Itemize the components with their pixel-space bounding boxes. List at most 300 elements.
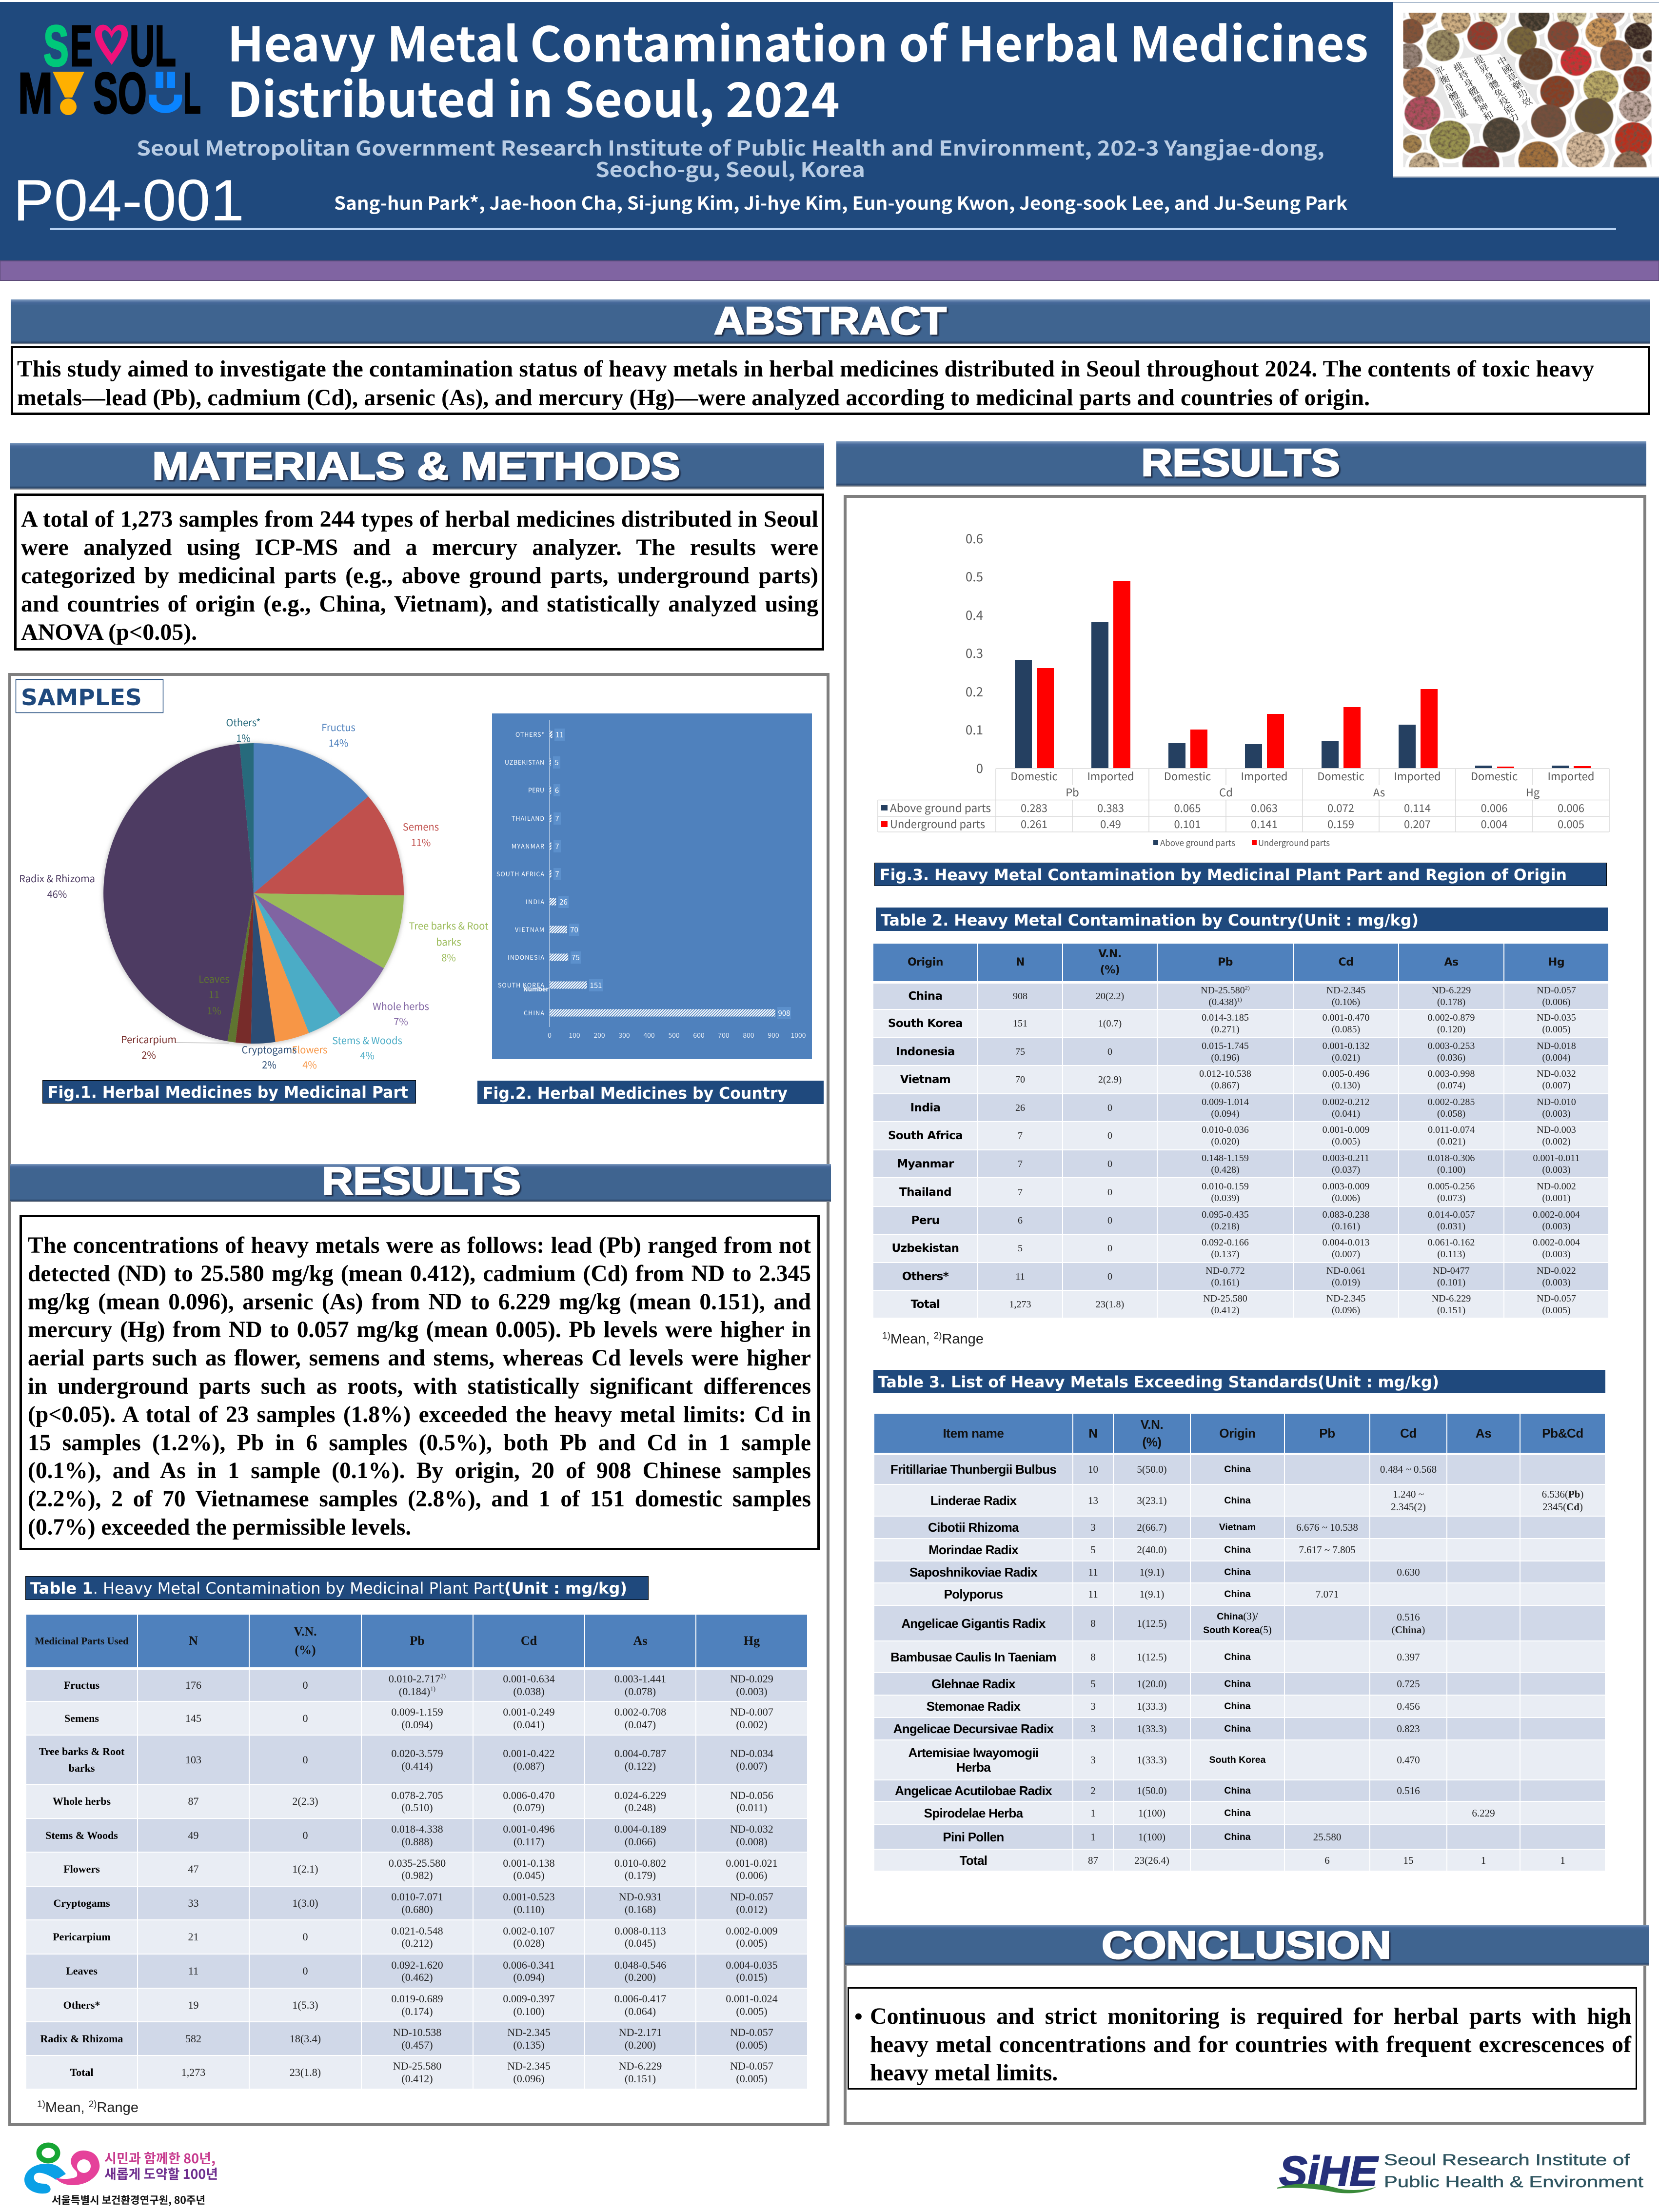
table 1: contamination by plant part: 0.004-0.787 (614, 1747, 666, 1759)
chart: metals by part and origin: 0.6 (966, 529, 983, 547)
footnote: table 2: 2) (934, 1331, 942, 1341)
chart: metals by part and origin: 0.383 (1097, 800, 1124, 815)
table 1: contamination by plant part: (0.005) (736, 2005, 768, 2017)
table 3: samples exceeding standards: Angelicae Gigantis Radix (901, 1616, 1046, 1631)
table 1: contamination by plant part: (0.002) (736, 1718, 768, 1730)
chart: metals by part and origin: Imported (1547, 768, 1595, 784)
table 2: contamination by country: 0.095-0.435 (1202, 1209, 1249, 1220)
table 2: contamination by country: Hg (1548, 956, 1564, 968)
chart: bars by country: INDONESIA (508, 952, 544, 962)
table 1: contamination by plant part: ND-6.229 (619, 2060, 662, 2072)
table 2: contamination by country: 0.015-1.745 (1202, 1041, 1249, 1051)
table 1: contamination by plant part: 1(3.0) (292, 1897, 318, 1909)
pie labels: 46% (47, 887, 67, 901)
header banner: L (183, 61, 201, 126)
chart: bars by country: 400 (643, 1030, 655, 1040)
table 1: contamination by plant part: (0.028) (513, 1937, 545, 1949)
chart: bars by country: SOUTH AFRICA (496, 869, 544, 878)
chart: metals by part and origin: 0.207 (1404, 816, 1431, 831)
table 2: contamination by country: (0.178) (1437, 997, 1465, 1007)
table 2: contamination by country: ND-0.018 (1537, 1041, 1576, 1051)
pie labels: Leaves (198, 971, 230, 986)
footnote: table 1: 2) (89, 2099, 97, 2110)
table 3: samples exceeding standards: 1(20.0) (1137, 1678, 1167, 1690)
table 2: contamination by country: 0 (1107, 1130, 1112, 1141)
table 1: contamination by plant part: (0.888) (401, 1836, 433, 1847)
title: Heavy Metal Contamination of Herbal Medicines (227, 6, 1368, 76)
table 3: samples exceeding standards: Spirodelae Herba (924, 1805, 1023, 1820)
table 1: contamination by plant part: 23(1.8) (290, 2066, 321, 2078)
table 2: contamination by country: (0.074) (1437, 1080, 1465, 1091)
table 2: contamination by country: (0.006) (1332, 1193, 1360, 1204)
table 2: contamination by country: (0.004) (1542, 1052, 1571, 1063)
chart: bars by country: 151 (590, 980, 602, 990)
table 3: samples exceeding standards: Origin (1219, 1426, 1256, 1441)
table 1: contamination by plant part: 0.001-0.634 (503, 1673, 555, 1685)
chart: bars by country: 908 (778, 1008, 790, 1018)
table 3: samples exceeding standards: Stemonae Radix (927, 1699, 1020, 1714)
table 2: contamination by country: (0.019) (1332, 1277, 1360, 1287)
table 1: contamination by plant part: ND-25.580 (393, 2060, 441, 2072)
text: conclusion paragraph: Continuous and strict monitoring is required for herbal parts with high (870, 2003, 1631, 2029)
table 1: contamination by plant part: 0.004-0.189 (614, 1823, 666, 1835)
poster number: P04-001 (13, 168, 244, 233)
chart: metals by part and origin: 0.49 (1100, 816, 1121, 831)
table 2: contamination by country: Others* (902, 1270, 948, 1283)
table 2: contamination by country: ND-0.057 (1537, 1293, 1576, 1304)
text: results paragraph: (0.1%), and As in 1 sample (0.1%). By origin, 20 of 908 Chinese samples (28, 1458, 811, 1483)
table 2: contamination by country: 0.011-0.074 (1428, 1125, 1475, 1135)
table 2: contamination by country: (0.106) (1332, 997, 1360, 1007)
title (227, 6, 1368, 131)
table 2: contamination by country: 70 (1015, 1074, 1025, 1085)
table 1: contamination by plant part: (%) (295, 1643, 316, 1657)
affiliation (137, 132, 1324, 183)
table 2: contamination by country: 0.002-0.004 (1533, 1237, 1580, 1248)
chart: bars by country: INDIA (526, 897, 544, 906)
table 1: contamination by plant part: 0.018-4.338 (391, 1823, 443, 1835)
logo: 80th anniversary: 새롭게 도약할 100년 (104, 2164, 218, 2183)
chart: bars by country: 11 (555, 730, 564, 740)
table 1: contamination by plant part: ND-0.034 (730, 1747, 773, 1759)
table 2: contamination by country: (0.003) (1542, 1108, 1571, 1119)
pie labels: Stems & Woods (332, 1033, 402, 1047)
title: Distributed in Seoul, 2024 (227, 62, 840, 131)
table 1: contamination by plant part: 0.092-1.620 (391, 1958, 443, 1971)
table 3: samples exceeding standards: 1(33.3) (1137, 1700, 1167, 1712)
table 1: contamination by plant part: Radix & Rhizoma (40, 2033, 123, 2044)
table 2: contamination by country: (0.041) (1332, 1108, 1360, 1119)
table 2: contamination by country: 2(2.9) (1098, 1074, 1122, 1085)
table 1: contamination by plant part: (0.003) (736, 1685, 768, 1698)
logo: SIHE: Public Health & Environment (1384, 2173, 1643, 2191)
table 1: contamination by plant part: (0.094) (401, 1718, 433, 1730)
table 2: contamination by country: 908 (1013, 991, 1027, 1002)
table 3: samples exceeding standards: 1 (1560, 1854, 1565, 1866)
table 2: contamination by country: ND-0.061 (1326, 1265, 1365, 1276)
label: samples: SAMPLES (21, 684, 142, 711)
table 2: contamination by country: 0.003-0.211 (1323, 1153, 1369, 1164)
chart: bars by country: 500 (668, 1030, 680, 1040)
table 1: contamination by plant part: (0.047) (625, 1718, 656, 1730)
table 3: samples exceeding standards: 8 (1090, 1651, 1096, 1663)
table 3: samples exceeding standards: 11 (1088, 1566, 1098, 1578)
table 1: contamination by plant part: Flowers (63, 1863, 100, 1875)
chart: bars by country: 0 (548, 1030, 552, 1040)
table 1: contamination by plant part: Pericarpium (53, 1931, 111, 1943)
table 2: contamination by country: ND-25.5802) (1201, 984, 1250, 996)
table 3: samples exceeding standards: Cibotii Rhizoma (928, 1520, 1019, 1535)
caption: figure 3: Fig.3. Heavy Metal Contamination by Medicinal Plant Part and Region of Origin (880, 866, 1567, 884)
table 2: contamination by country: (%) (1100, 964, 1120, 976)
table 3: samples exceeding standards: 0.823 (1397, 1723, 1420, 1735)
pie labels: Flowers (292, 1042, 327, 1056)
table 2: contamination by country: (0.058) (1437, 1108, 1465, 1119)
table 1: contamination by plant part: Cd (521, 1634, 537, 1648)
table 2: contamination by country: ND-0.035 (1537, 1012, 1576, 1023)
pie labels: 2% (262, 1057, 276, 1071)
table 2: contamination by country: (0.151) (1437, 1305, 1465, 1316)
table 3: samples exceeding standards: China (1224, 1566, 1251, 1577)
table 1: contamination by plant part: (0.100) (513, 2005, 545, 2017)
table 1: contamination by plant part: ND-0.057 (730, 2060, 773, 2072)
table 1: contamination by plant part: (0.200) (625, 2038, 656, 2051)
text: results paragraph: in underground parts such as roots, with statistically significant differences (28, 1374, 811, 1399)
table 3: samples exceeding standards: 1(12.5) (1137, 1617, 1167, 1629)
table 3: samples exceeding standards: China (1224, 1589, 1251, 1600)
table 2: contamination by country: 0 (1107, 1047, 1112, 1057)
caption: table 2 (876, 908, 1608, 931)
table 1: contamination by plant part: 0.020-3.579 (391, 1747, 443, 1759)
table 1: contamination by plant part: ND-2.171 (619, 2026, 662, 2038)
table 2: contamination by country: India (910, 1101, 940, 1114)
text: results paragraph: (p<0.05). A total of 23 samples (1.8%) exceeded the heavy metal limits: Cd in (28, 1402, 811, 1427)
text: results paragraph: (2.2%), 2 of 70 Vietnamese samples (2.8%), and 1 of 151 domestic samples (28, 1486, 811, 1512)
table 2: contamination by country: ND-0.022 (1537, 1265, 1576, 1276)
chart: metals by part and origin: Above ground parts (1160, 836, 1235, 849)
table 2: contamination by country: 0.009-1.014 (1202, 1096, 1249, 1107)
table 1: contamination by plant part: Cryptogams (53, 1897, 110, 1909)
table 1: contamination by plant part: (0.680) (401, 1903, 433, 1916)
table 1: contamination by plant part: (0.212) (401, 1937, 433, 1949)
table 2: contamination by country: 26 (1015, 1102, 1025, 1113)
table 3: samples exceeding standards: Pb&Cd (1542, 1426, 1583, 1441)
table 2: contamination by country: (0.120) (1437, 1024, 1465, 1035)
table 3: samples exceeding standards: 0.516 (1397, 1611, 1420, 1623)
chart: metals by part and origin: 0.101 (1174, 816, 1201, 831)
logo: 80th anniversary (24, 2145, 218, 2207)
chart: bars by country: 900 (768, 1030, 779, 1040)
table 3: samples exceeding standards: 1.240 ~ (1393, 1488, 1424, 1500)
table 1: contamination by plant part: (0.117) (514, 1836, 544, 1847)
table 3: samples exceeding standards: 2(66.7) (1137, 1521, 1167, 1533)
table 1: contamination by plant part: 0 (302, 1679, 308, 1691)
table 1: contamination by plant part: Hg (744, 1634, 760, 1648)
table 2: contamination by country: 0.005-0.256 (1428, 1181, 1475, 1192)
table 2: contamination by country: (0.113) (1437, 1249, 1465, 1260)
table 1: contamination by plant part: Semens (64, 1712, 99, 1724)
chart: bars by country: THAILAND (512, 813, 544, 823)
heading: results right (836, 441, 1646, 487)
table 1: contamination by plant part: 0.002-0.009 (726, 1924, 778, 1937)
table 2: contamination by country: (0.007) (1542, 1080, 1571, 1091)
logo: SIHE: SiHE (1279, 2148, 1379, 2195)
table 3: samples exceeding standards: China (1224, 1544, 1251, 1555)
table 1: contamination by plant part: 145 (185, 1712, 201, 1724)
table 2: contamination by country: 0.148-1.159 (1202, 1153, 1249, 1164)
chart: metals by part and origin: 0.006 (1481, 800, 1507, 815)
chart: bars by country: SOUTH KOREA (498, 980, 544, 989)
chart: bars by country: 75 (572, 952, 580, 963)
header banner (0, 0, 1659, 261)
text: conclusion paragraph (870, 2003, 1632, 2086)
table 2: contamination by country: 23(1.8) (1096, 1299, 1124, 1310)
pie labels: barks (436, 934, 461, 948)
table 1: contamination by plant part: 0.010-7.071 (391, 1891, 443, 1903)
chart: metals by part and origin: 0.006 (1558, 800, 1584, 815)
logo: Seoul My Soul: SO (93, 61, 147, 126)
table 1: contamination by plant part: ND-0.057 (730, 2026, 773, 2038)
table 1: contamination by plant part: (0.184)1) (399, 1685, 435, 1698)
table 1: contamination by plant part: (0.179) (625, 1869, 656, 1881)
table 1: contamination by plant part: (0.011) (736, 1801, 767, 1814)
table 2: contamination by country: (0.021) (1332, 1052, 1360, 1063)
table 1: contamination by plant part: (0.045) (513, 1869, 545, 1881)
table 1: contamination by plant part: 0.001-0.422 (503, 1747, 555, 1759)
table 3: samples exceeding standards: South Korea(5) (1203, 1624, 1272, 1636)
chart: metals by part and origin: Underground parts (1258, 836, 1330, 849)
table 1: contamination by plant part: ND-0.029 (730, 1673, 773, 1685)
table 1: contamination by plant part: Tree barks & Root (39, 1745, 124, 1758)
table 1: contamination by plant part: ND-0.007 (730, 1706, 773, 1718)
chart: metals by part and origin: 0.283 (1021, 800, 1047, 815)
table 3: samples exceeding standards: 23(26.4) (1134, 1854, 1169, 1866)
table 3: samples exceeding standards: Saposhnikoviae Radix (909, 1564, 1037, 1579)
footnote: table 2: Mean, (890, 1331, 934, 1347)
chart: bars by country: 6 (555, 785, 559, 795)
table 3: samples exceeding standards: 0.484 ~ 0.568 (1380, 1463, 1437, 1475)
table 1: contamination by plant part: (0.005) (736, 2073, 768, 2084)
table 2: contamination by country: (0.001) (1542, 1193, 1571, 1204)
table 1: contamination by plant part: Others* (63, 1998, 100, 2011)
table 1: contamination by plant part: (0.462) (401, 1971, 433, 1983)
table 3: samples exceeding standards: China (1224, 1679, 1251, 1689)
table 1: contamination by plant part: 0.010-2.7172) (389, 1673, 446, 1685)
table 1: contamination by plant part: 87 (188, 1795, 199, 1807)
table 2: contamination by country: ND-2.345 (1326, 1293, 1365, 1304)
table 2: contamination by country: 20(2.2) (1096, 991, 1124, 1002)
table 3: samples exceeding standards: China (1224, 1495, 1251, 1506)
table 2: contamination by country: ND-25.580 (1203, 1293, 1247, 1304)
table 2: contamination by country: (0.094) (1211, 1108, 1240, 1119)
table 2: contamination by country: ND-0.772 (1205, 1265, 1245, 1276)
chart: bars by country: 70 (570, 925, 578, 935)
table 2: contamination by country: (0.037) (1332, 1165, 1360, 1175)
table 1: contamination by plant part: 0.008-0.113 (614, 1924, 666, 1937)
caption: figure 1: Fig.1. Herbal Medicines by Medicinal Part (48, 1083, 408, 1102)
chart: metals by part and origin: Hg (1526, 784, 1540, 800)
chart: metals by part and origin: 0.072 (1327, 800, 1354, 815)
text: results paragraph: detected (ND) to 25.580 mg/kg (mean 0.412), cadmium (Cd) from ND to 2.345 (28, 1261, 811, 1286)
text: results paragraph: aerial parts such as flower, semens and stems, whereas Cd levels were higher (28, 1345, 811, 1371)
chart: bars by country: 7 (555, 813, 559, 824)
pie labels: Pericarpium (121, 1032, 177, 1046)
table 1: contamination by plant part: (0.041) (513, 1718, 545, 1730)
affiliation: Seocho-gu, Seoul, Korea (595, 154, 865, 183)
table 2: contamination by country: (0.003) (1542, 1165, 1571, 1175)
table 3: samples exceeding standards: N (1088, 1426, 1098, 1441)
table 2: contamination by country: ND-0.002 (1537, 1181, 1576, 1192)
table 1: contamination by plant part: 0 (302, 1965, 308, 1977)
table 2: contamination by country: 0.001-0.470 (1323, 1012, 1369, 1023)
table 3: samples exceeding standards: 1(100) (1138, 1807, 1165, 1819)
table 2: contamination by country: 151 (1013, 1018, 1027, 1029)
caption: table 1: Table 1. Heavy Metal Contamination by Medicinal Plant Part(Unit : mg/kg) (30, 1579, 627, 1598)
table 2: contamination by country (873, 944, 1608, 1318)
table 2: contamination by country: (0.005) (1542, 1305, 1571, 1316)
table 3: samples exceeding standards: Angelicae Acutilobae Radix (895, 1783, 1052, 1798)
chart: metals by part and origin: 0.004 (1481, 816, 1507, 831)
table 2: contamination by country: (0.096) (1332, 1305, 1360, 1316)
text: conclusion paragraph: heavy metal limits. (870, 2060, 1058, 2086)
table 2: contamination by country: 75 (1015, 1047, 1025, 1057)
table 1: contamination by plant part: ND-0.032 (730, 1823, 773, 1835)
table 1: contamination by plant part: (0.015) (736, 1971, 768, 1983)
table 3: samples exceeding standards: 1 (1090, 1831, 1096, 1842)
table 2: contamination by country: 0.003-0.009 (1323, 1181, 1369, 1192)
table 1: contamination by plant part: V.N. (294, 1624, 317, 1639)
table 3: samples exceeding standards: 1 (1481, 1854, 1486, 1866)
table 2: contamination by country: ND-0.003 (1537, 1125, 1576, 1135)
table 3: samples exceeding standards: 6.229 (1472, 1807, 1495, 1819)
pie labels (19, 715, 489, 1071)
table 1: contamination by plant part: 0 (302, 1712, 308, 1724)
chart: metals by part and origin: 0.261 (1021, 816, 1047, 831)
table 3: samples exceeding standards: China(3)/ (1217, 1610, 1258, 1622)
text: methods paragraph: ANOVA (p<0.05). (21, 619, 197, 645)
footnote: table 2: Range (942, 1331, 984, 1347)
chart: metals by part and origin: 0.065 (1174, 800, 1201, 815)
table 1: contamination by plant part: 1(2.1) (292, 1863, 318, 1875)
table 2: contamination by country: 0.014-0.057 (1428, 1209, 1475, 1220)
table 1: contamination by plant part: (0.168) (625, 1903, 656, 1916)
text: results paragraph: The concentrations of heavy metals were as follows: lead (Pb) ranged from not (28, 1233, 811, 1258)
table 2: contamination by country: 0.002-0.004 (1533, 1209, 1580, 1220)
results text box (20, 1216, 818, 1549)
table 3: samples exceeding standards: Angelicae Decursivae Radix (893, 1721, 1053, 1736)
table 2: contamination by country: 0.012-10.538 (1199, 1068, 1251, 1079)
table 2: contamination by country: (0.005) (1542, 1024, 1571, 1035)
table 2: contamination by country: (0.100) (1437, 1165, 1465, 1175)
table 3: samples exceeding standards: China (1224, 1701, 1251, 1712)
abstract text box (12, 347, 1649, 414)
table 1: contamination by plant part: 0.001-0.021 (726, 1857, 778, 1869)
table 3: samples exceeding standards: V.N. (1141, 1417, 1163, 1432)
chart: metals by part and origin: 0.4 (966, 606, 983, 624)
table 3: samples exceeding standards: 7.071 (1316, 1588, 1339, 1600)
chart: bars by country: PERU (528, 785, 544, 794)
table 3: samples exceeding standards: 6.676 ~ 10.538 (1296, 1521, 1358, 1533)
table 1: contamination by plant part: 33 (188, 1897, 199, 1909)
heading: conclusion (845, 1923, 1649, 1967)
photo: herbal medicine bowls: 維持身體精神和 (1450, 59, 1497, 123)
chart: metals by part and origin: Above ground parts (890, 800, 991, 815)
table 3: samples exceeding standards: 7.617 ~ 7.805 (1299, 1544, 1356, 1556)
table 1: contamination by plant part: (0.008) (736, 1836, 768, 1847)
table 1: contamination by plant part: 582 (185, 2033, 201, 2045)
table 2: contamination by country: (0.161) (1332, 1221, 1360, 1232)
panel: samples and left results (10, 674, 828, 2125)
table 1: contamination by plant part: ND-0.056 (730, 1789, 773, 1801)
chart: bars by country: CHINA (524, 1008, 544, 1017)
text: methods paragraph (21, 506, 818, 645)
text: results paragraph (28, 1233, 811, 1540)
pie labels: 11 (209, 987, 219, 1001)
logo: Seoul My Soul: M (18, 61, 53, 126)
heading: materials and methods: MATERIALS & METHODS (152, 444, 680, 488)
table 2: contamination by country: 0.001-0.011 (1533, 1153, 1580, 1164)
table 2: contamination by country: Myanmar (897, 1158, 954, 1170)
chart: bars by country: 700 (718, 1030, 730, 1040)
table 1: contamination by plant part: (0.094) (513, 1971, 545, 1983)
table 1: contamination by plant part: 176 (185, 1679, 201, 1691)
table 3: samples exceeding standards: 1(50.0) (1137, 1785, 1167, 1797)
table 2: contamination by country: ND-2.345 (1326, 985, 1365, 996)
table 3: samples exceeding standards: 3 (1090, 1521, 1096, 1533)
caption: figure 2: Fig.2. Herbal Medicines by Country (483, 1084, 788, 1103)
table 2: contamination by country: 0.083-0.238 (1323, 1209, 1369, 1220)
table 1: contamination by plant part: Whole herbs (53, 1795, 111, 1807)
pie labels: 4% (302, 1057, 317, 1071)
table 1: contamination by plant part: 0.021-0.548 (391, 1924, 443, 1937)
table 1: contamination by plant part: (0.087) (513, 1759, 545, 1772)
text: methods paragraph: categorized by medicinal parts (e.g., above ground parts, underground parts) (21, 563, 818, 589)
table 2: contamination by country: ND-0477 (1433, 1265, 1470, 1276)
table 3: samples exceeding standards: 2345(Cd) (1542, 1501, 1583, 1513)
conclusion text box: • (854, 2004, 863, 2030)
table 2: contamination by country: 0.001-0.009 (1323, 1125, 1369, 1135)
table 2: contamination by country: 0 (1107, 1215, 1112, 1226)
footnote: table 1: Mean, (45, 2100, 89, 2115)
table 3: samples exceeding standards: Herba (956, 1760, 990, 1775)
table 1: contamination by plant part: 0.009-0.397 (503, 1993, 555, 2005)
table 1: contamination by plant part: (0.174) (401, 2005, 433, 2017)
table 3: samples exceeding standards: 0.397 (1397, 1651, 1420, 1663)
table 1: contamination by plant part: (0.982) (401, 1869, 433, 1881)
table 1: contamination by plant part: 19 (188, 1999, 199, 2011)
chart: bars by country: OTHERS* (515, 730, 544, 739)
pie labels: Cryptogams (242, 1042, 296, 1056)
table 2: contamination by country: (0.003) (1542, 1277, 1571, 1287)
footnote: table 1: Range (97, 2100, 138, 2115)
chart: metals by part and origin: Domestic (1010, 768, 1058, 784)
table 1: contamination by plant part: (0.064) (625, 2005, 656, 2017)
table 2: contamination by country: 5 (1018, 1243, 1023, 1254)
table 1: contamination by plant part: (0.007) (736, 1759, 768, 1772)
table 1: contamination by plant part: 0.001-0.523 (503, 1891, 555, 1903)
pie labels: 7% (394, 1014, 408, 1028)
table 2: contamination by country: 0.002-0.212 (1323, 1096, 1369, 1107)
table 2: contamination by country: ND-0.010 (1537, 1096, 1576, 1107)
chart: metals by part and origin: Underground parts (890, 816, 985, 831)
table 3: samples exceeding standards: Fritillariae Thunbergii Bulbus (890, 1462, 1056, 1477)
table 3: samples exceeding standards: As (1476, 1426, 1491, 1441)
heading: conclusion: CONCLUSION (1102, 1923, 1391, 1967)
heading: results left (10, 1159, 831, 1203)
table 2: contamination by country: V.N. (1098, 948, 1122, 960)
table 1: contamination by plant part: 0 (302, 1829, 308, 1841)
chart: bars by country: 7 (555, 869, 559, 879)
